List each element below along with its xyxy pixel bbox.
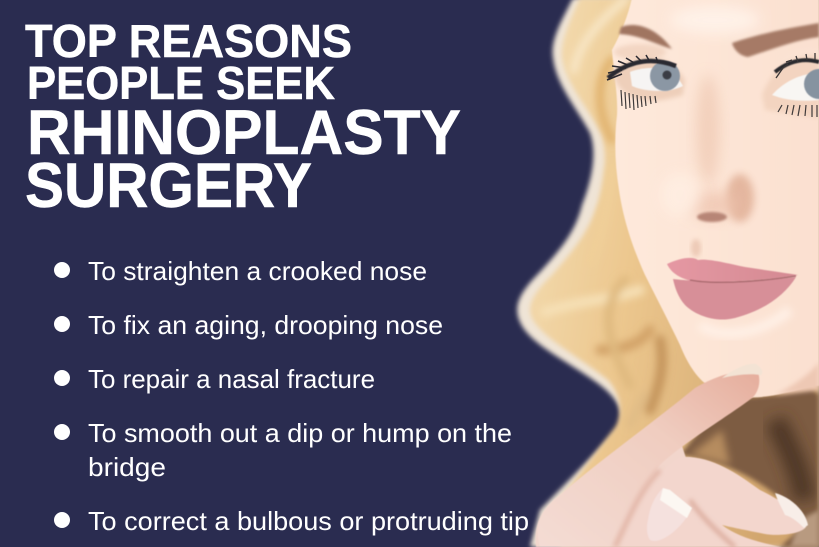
bullet 4 xyxy=(54,418,512,482)
hand and fingers xyxy=(536,364,808,547)
index finger xyxy=(564,374,760,493)
right eyebrow xyxy=(732,23,819,57)
title line: surgery: SURGERY xyxy=(25,151,312,221)
right fingernail xyxy=(775,493,808,528)
photo: woman touching chin xyxy=(517,0,819,547)
hair strands xyxy=(545,0,662,425)
bullet 4: bridge xyxy=(88,452,166,482)
curled fingers xyxy=(685,456,806,547)
left eyebrow xyxy=(619,25,672,49)
nose xyxy=(697,212,727,222)
bullet 4: To smooth out a dip or hump on the xyxy=(88,418,512,448)
left eye xyxy=(607,55,685,110)
thumb nail xyxy=(647,490,686,541)
hair body xyxy=(530,0,819,547)
title line: top reasons: TOP REASONS xyxy=(25,15,352,67)
bullet 3: To repair a nasal fracture xyxy=(88,364,375,394)
face xyxy=(612,0,819,397)
hand base xyxy=(535,446,686,547)
title xyxy=(25,15,461,221)
title line: rhinoplasty: RHINOPLASTY xyxy=(27,98,461,168)
lips xyxy=(667,258,798,320)
dark hair under chin xyxy=(680,388,819,547)
bullet 2: To fix an aging, drooping nose xyxy=(88,310,443,340)
bullet 1: To straighten a crooked nose xyxy=(88,256,427,286)
hair halo xyxy=(517,0,819,547)
bullet list xyxy=(54,256,529,536)
index fingernail xyxy=(722,364,762,378)
title line: people seek: PEOPLE SEEK xyxy=(27,57,335,109)
bullet 5: To correct a bulbous or protruding tip xyxy=(88,506,529,536)
right eye xyxy=(762,53,819,118)
face shading xyxy=(614,6,819,395)
